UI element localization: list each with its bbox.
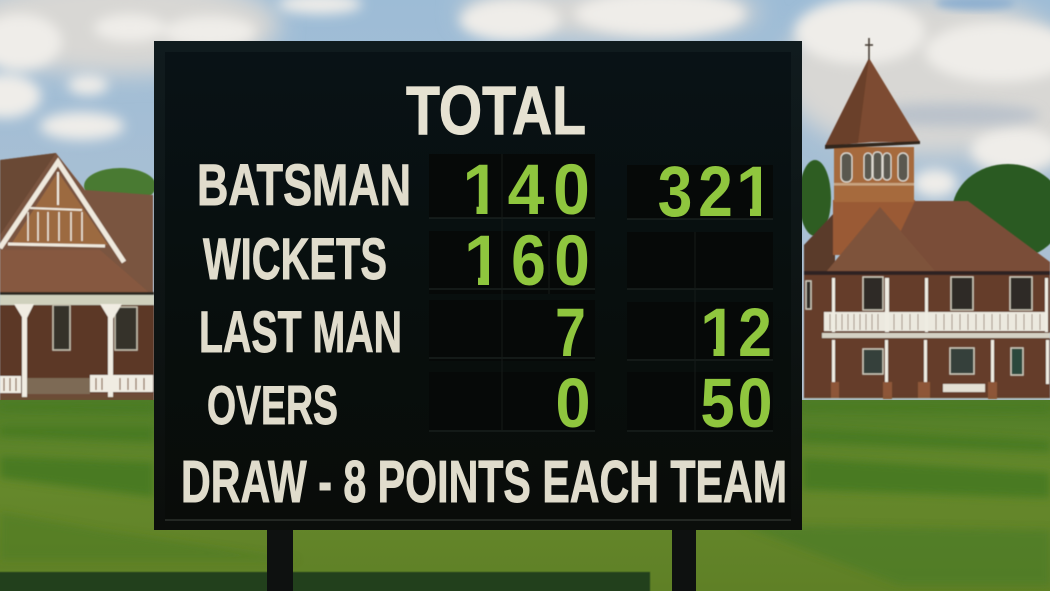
batsman score digits: 3 <box>658 152 692 232</box>
wickets digits: 6 <box>511 221 546 301</box>
striped grass field <box>0 400 1050 591</box>
overs digits: 0 <box>555 365 591 443</box>
scoreboard support posts <box>267 528 696 591</box>
wickets digits: 1 <box>464 222 503 301</box>
batsman score digits: 2 <box>698 152 733 232</box>
result line: DRAW - 8 POINTS EACH TEAM <box>181 449 787 515</box>
row labels: LAST MAN <box>199 300 402 365</box>
batsman score digits: 1 <box>462 151 502 230</box>
sky background with clouds <box>0 0 1050 410</box>
batsman score digits: 0 <box>553 150 590 230</box>
row labels: BATSMAN <box>197 153 411 218</box>
last man digits: 2 <box>738 293 772 371</box>
scoreboard <box>154 41 802 530</box>
wickets digits <box>468 234 588 286</box>
last man digits: 1 <box>700 294 738 371</box>
last man digits: 7 <box>555 294 586 371</box>
overs digits: 5 <box>700 363 735 442</box>
batsman score digits: 4 <box>508 150 544 230</box>
row labels: OVERS <box>207 374 338 436</box>
trees behind the pavilions <box>84 160 1050 260</box>
overs digits: 0 <box>737 365 773 443</box>
left pavilion <box>0 153 154 402</box>
title: TOTAL: TOTAL <box>406 72 586 149</box>
overs digits <box>555 363 773 443</box>
batsman score digits: 1 <box>736 153 775 232</box>
row labels: WICKETS <box>203 227 387 292</box>
score slot panels <box>429 154 773 432</box>
row labels <box>197 153 411 436</box>
right pavilion with tower <box>804 38 1050 399</box>
batsman score digits <box>467 164 761 217</box>
last man digits <box>558 308 770 356</box>
wickets digits: 0 <box>554 222 590 301</box>
